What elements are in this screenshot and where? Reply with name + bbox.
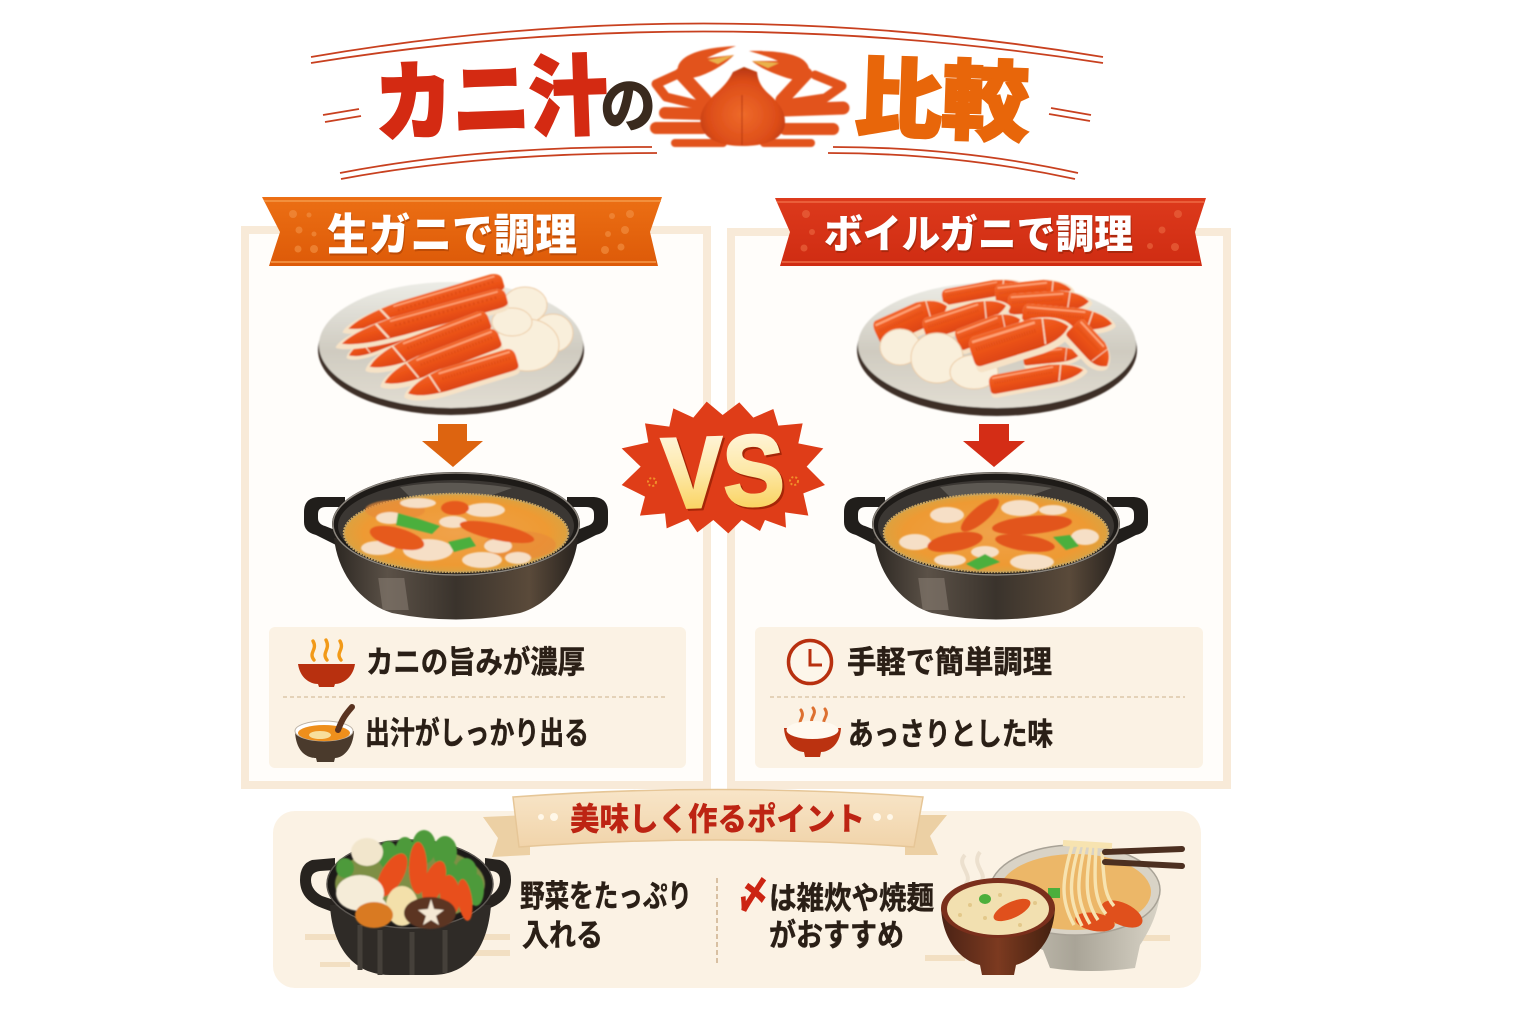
panel: raw crab bbox=[245, 197, 707, 785]
plate with boiled crab legs bbox=[857, 273, 1137, 416]
text: light taste: あっさりとした味 bbox=[848, 709, 1053, 754]
icon: white rice bowl with steam bbox=[784, 708, 841, 757]
banner: boiled crab heading: ボイルガニで調理 bbox=[824, 202, 1133, 260]
banner: raw crab heading: 生ガニで調理 bbox=[328, 201, 578, 265]
text: plenty of vegetables bbox=[520, 871, 692, 955]
icon: soup bowl with spoon bbox=[295, 707, 354, 762]
title bbox=[311, 24, 1103, 179]
image: hot pot with vegetables bbox=[300, 830, 511, 975]
icon: clock bbox=[788, 640, 832, 684]
ribbon: tips heading bbox=[483, 790, 947, 857]
title: の bbox=[600, 58, 656, 145]
text: stock comes through: 出汁がしっかり出る bbox=[365, 708, 589, 753]
arrow down bbox=[422, 424, 483, 467]
text: rich crab flavour: カニの旨みが濃厚 bbox=[366, 637, 585, 682]
pot of soup bbox=[844, 472, 1148, 620]
image: rice porridge and noodle bowls bbox=[925, 843, 1182, 975]
panel: tips for tasty soup bbox=[273, 790, 1201, 988]
arrow down bbox=[963, 424, 1025, 467]
VS starburst: VS bbox=[660, 414, 786, 530]
VS starburst: VS bbox=[662, 416, 788, 532]
text: finish with rice porridge or noodles: は雑炊や焼麺 bbox=[769, 873, 934, 918]
text: finish with rice porridge or noodles: 〆 bbox=[737, 864, 769, 919]
text: finish with rice porridge or noodles bbox=[737, 864, 934, 955]
VS starburst bbox=[622, 402, 825, 533]
text: plenty of vegetables: 入れる bbox=[522, 910, 603, 955]
banner: raw crab heading bbox=[262, 197, 662, 266]
plate with raw crab legs bbox=[318, 272, 584, 415]
icon: steaming red bowl bbox=[298, 640, 355, 687]
text: easy and simple: 手軽で簡単調理 bbox=[847, 637, 1052, 682]
title: 比較 bbox=[853, 28, 1031, 159]
banner: raw crab heading: 生ガニで調理 bbox=[327, 199, 577, 263]
title: カニ汁 bbox=[373, 26, 609, 159]
feature list: boiled crab bbox=[755, 627, 1203, 768]
pot of soup bbox=[304, 472, 608, 620]
banner: boiled crab heading bbox=[775, 198, 1206, 266]
panel: boiled crab bbox=[731, 198, 1227, 785]
icon: crab bbox=[656, 46, 843, 146]
text: plenty of vegetables: 野菜をたっぷり bbox=[520, 871, 692, 916]
ribbon: tips heading: 美味しく作るポイント bbox=[570, 794, 865, 840]
text: finish with rice porridge or noodles: がおすすめ bbox=[769, 910, 904, 955]
banner: boiled crab heading: ボイルガニで調理 bbox=[825, 204, 1134, 262]
feature list: raw crab bbox=[269, 627, 686, 768]
